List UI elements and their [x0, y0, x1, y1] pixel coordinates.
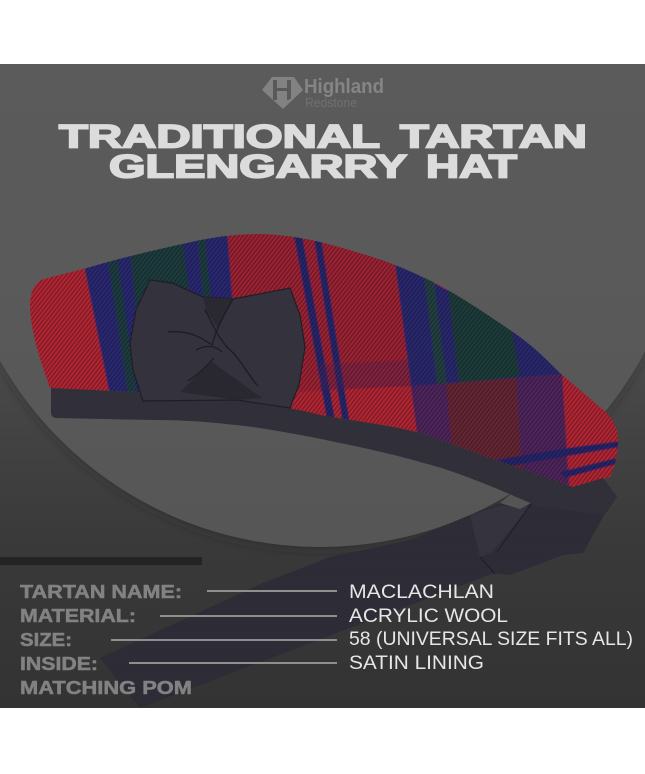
row: inside: [20, 653, 484, 674]
horizontal stripes in red: [320, 360, 412, 390]
row: size: [20, 629, 633, 650]
maroon mix: [446, 378, 522, 470]
dark upper part of central red: [227, 230, 412, 395]
bow centre strips: [203, 297, 233, 328]
title line 1: TARTAN: [400, 118, 587, 154]
green stripe: [423, 270, 447, 384]
left blue band: [84, 236, 233, 392]
brand sub-name: Redstone: [305, 96, 357, 110]
specification list: [20, 582, 633, 698]
background circle: [0, 0, 645, 550]
title line 1: TRADITIONAL: [59, 118, 380, 154]
row: size: 58 (UNIVERSAL SIZE FITS ALL): [349, 629, 633, 650]
hat bow: [130, 280, 305, 408]
divider bar: [0, 557, 202, 565]
thin blue stripes: [294, 235, 336, 425]
bow knot folds: [168, 299, 258, 386]
hat crown tartan: [20, 225, 630, 495]
brand name: Highland: [304, 76, 384, 98]
plaid purple lower section: [412, 374, 569, 485]
right blue band: [394, 265, 563, 432]
row: inside: INSIDE:: [20, 654, 98, 674]
row: matching pom: MATCHING POM: [20, 678, 192, 698]
hat band: [51, 388, 617, 515]
row: material: [20, 606, 508, 627]
row: material: MATERIAL:: [20, 606, 136, 626]
twill texture: [20, 225, 630, 495]
title line 2: GLENGARRY: [109, 148, 407, 184]
logo: [262, 76, 384, 110]
bow shape: [130, 280, 305, 408]
title line 2: HAT: [426, 148, 517, 184]
row: tartan name: MACLACHLAN: [349, 582, 494, 603]
row: material: ACRYLIC WOOL: [349, 606, 508, 627]
title: [59, 118, 587, 184]
row: tartan name: TARTAN NAME:: [20, 582, 182, 602]
icon: diamond logo: [262, 77, 303, 109]
green block: [130, 240, 190, 310]
hat ribbon tail: [100, 478, 617, 708]
row: size: SIZE:: [20, 630, 72, 650]
green stripe left: [108, 260, 137, 395]
red base: [30, 268, 618, 487]
right green block: [448, 290, 520, 383]
row: tartan name: [20, 582, 494, 603]
row: inside: SATIN LINING: [349, 653, 484, 674]
